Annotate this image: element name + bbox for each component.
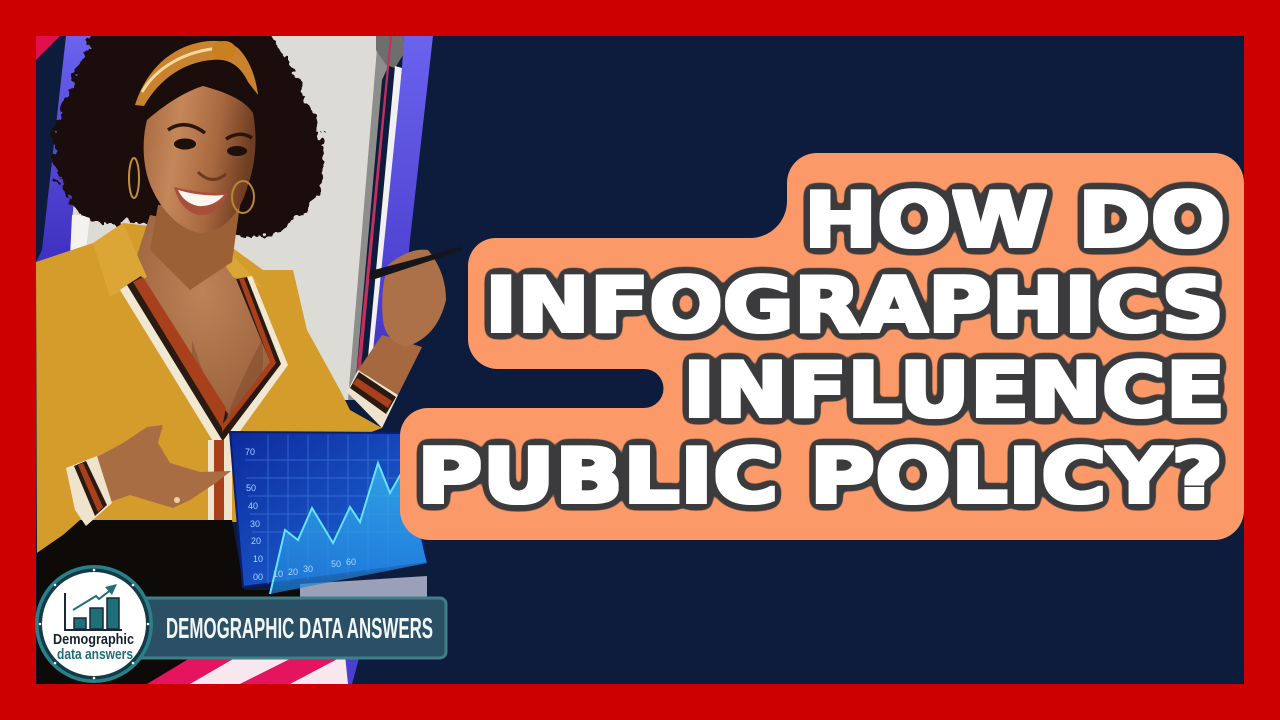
raised arm and hand with pen xyxy=(347,247,463,428)
right earring xyxy=(232,181,254,213)
head xyxy=(129,41,258,290)
left purple band xyxy=(36,36,91,262)
gesturing hand xyxy=(66,425,231,526)
white stripe xyxy=(190,655,298,684)
bar 3 xyxy=(107,598,119,629)
nose shading xyxy=(198,172,226,180)
logo badge xyxy=(35,565,153,683)
red line xyxy=(354,36,392,400)
cuff dark stripe xyxy=(350,372,396,414)
axis labels: 00 xyxy=(253,572,263,582)
bar 2 xyxy=(90,608,103,629)
axis labels: 20 xyxy=(288,567,298,577)
ring dots xyxy=(39,569,149,679)
left white strip xyxy=(70,215,90,251)
title: INFLUENCE xyxy=(683,346,1225,434)
right neck trim xyxy=(222,276,288,456)
left earring xyxy=(129,158,139,198)
ring xyxy=(174,497,180,503)
right board frame xyxy=(348,51,388,400)
second pink stripe xyxy=(240,655,345,684)
second white stripe xyxy=(290,655,348,684)
teeth xyxy=(178,190,224,206)
axis labels: 10 xyxy=(253,554,263,564)
axes xyxy=(65,593,122,630)
shirt xyxy=(36,215,382,553)
right collar xyxy=(226,256,262,288)
face xyxy=(144,86,255,233)
photo: presenter with chart xyxy=(36,32,463,684)
headband knot xyxy=(212,41,236,59)
placket stripes xyxy=(214,440,224,522)
monitor screen xyxy=(230,432,427,587)
chart icon xyxy=(65,584,122,630)
title background panel xyxy=(400,153,1244,540)
black skirt xyxy=(37,520,300,684)
white disc xyxy=(42,572,146,676)
shirt body xyxy=(36,223,382,553)
bar 1 xyxy=(74,618,86,629)
hand shape xyxy=(90,425,231,508)
headband highlight xyxy=(142,48,222,92)
axis labels: 70 xyxy=(245,447,255,457)
dark ring xyxy=(38,568,150,680)
chart monitor xyxy=(230,432,427,597)
logo word 1: Demographic xyxy=(53,631,134,648)
left cuff xyxy=(66,456,112,526)
left neck trim xyxy=(120,278,222,440)
cleavage shading xyxy=(192,340,263,418)
chart area xyxy=(270,463,427,594)
axis labels: 30 xyxy=(250,519,260,529)
left cuff stripes xyxy=(74,461,107,516)
left eyebrow xyxy=(168,125,205,133)
left eye xyxy=(174,138,196,150)
right eyebrow xyxy=(226,134,252,139)
axis labels: 60 xyxy=(346,557,356,567)
banner plate xyxy=(130,598,446,658)
pink stripe xyxy=(147,655,240,684)
cuff red stripe xyxy=(353,378,392,408)
outer ring xyxy=(35,565,153,683)
whiteboard xyxy=(70,36,378,400)
screen grid xyxy=(245,435,423,584)
growth arrow xyxy=(73,589,112,610)
axis labels: 10 xyxy=(273,569,283,579)
axis labels: 50 xyxy=(246,483,256,493)
axis labels xyxy=(245,447,356,582)
lips xyxy=(174,187,228,215)
hair xyxy=(53,32,325,238)
title: INFOGRAPHICS xyxy=(485,261,1224,349)
flag stripes at bottom xyxy=(147,655,360,684)
axis labels: 50 xyxy=(331,559,341,569)
title: PUBLIC POLICY? xyxy=(417,432,1223,520)
right trim dark xyxy=(222,277,281,442)
monitor stand xyxy=(300,576,427,597)
axis labels: 40 xyxy=(248,501,258,511)
neck and chest xyxy=(137,215,270,418)
left trim red xyxy=(133,277,226,428)
white strip xyxy=(366,66,402,378)
frame top cap xyxy=(376,36,404,68)
axis labels: 20 xyxy=(251,536,261,546)
chart line xyxy=(270,463,402,594)
forearm xyxy=(358,335,422,395)
neck xyxy=(150,205,240,290)
front placket xyxy=(208,440,232,522)
right purple band xyxy=(368,36,433,400)
axis labels: 30 xyxy=(303,564,313,574)
logo word 2: data answers xyxy=(57,646,133,663)
banner text: DEMOGRAPHIC DATA ANSWERS xyxy=(166,613,433,645)
right trim red xyxy=(222,278,276,432)
channel name banner xyxy=(130,598,446,658)
pen xyxy=(369,247,463,279)
left collar xyxy=(93,223,147,297)
left trim dark xyxy=(127,276,228,440)
hand xyxy=(382,250,446,347)
left cuff red xyxy=(78,463,103,512)
title: HOW DO xyxy=(804,176,1225,264)
cuff xyxy=(347,370,398,428)
right eye xyxy=(227,146,247,156)
headband xyxy=(135,41,258,106)
purple base xyxy=(147,655,360,684)
arrow head xyxy=(105,584,117,595)
pink corner xyxy=(36,36,60,60)
title xyxy=(417,176,1225,520)
